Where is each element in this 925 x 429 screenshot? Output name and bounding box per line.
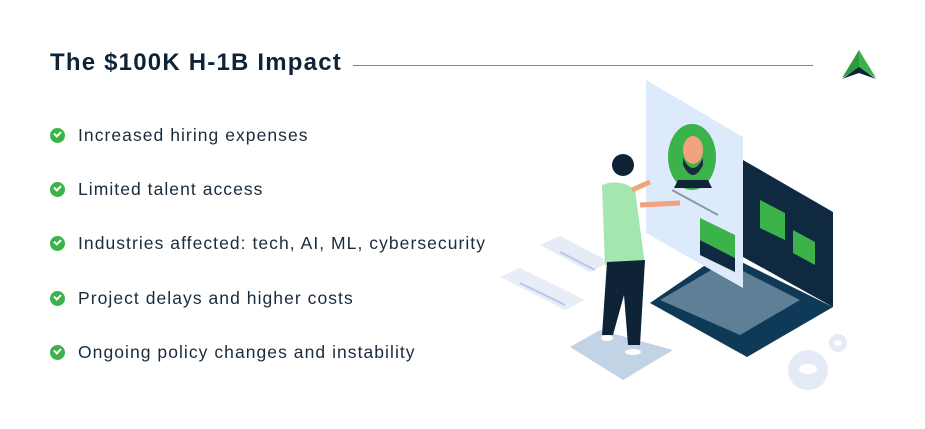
title: The $100K H-1B Impact [50,49,342,76]
list: item 3: Industries affected: tech, AI, ML, cybersecurity [78,232,486,252]
list: item 5: Ongoing policy changes and instability [78,342,416,362]
gears [788,334,847,390]
person [570,154,680,380]
laptop [650,160,833,357]
list: item 4: Project delays and higher costs [78,288,354,308]
logo [842,50,876,79]
side cards [500,236,610,310]
resume panel [646,80,743,288]
list: item 1: Increased hiring expenses [78,124,309,144]
list: item 2: Limited talent access [78,178,263,198]
